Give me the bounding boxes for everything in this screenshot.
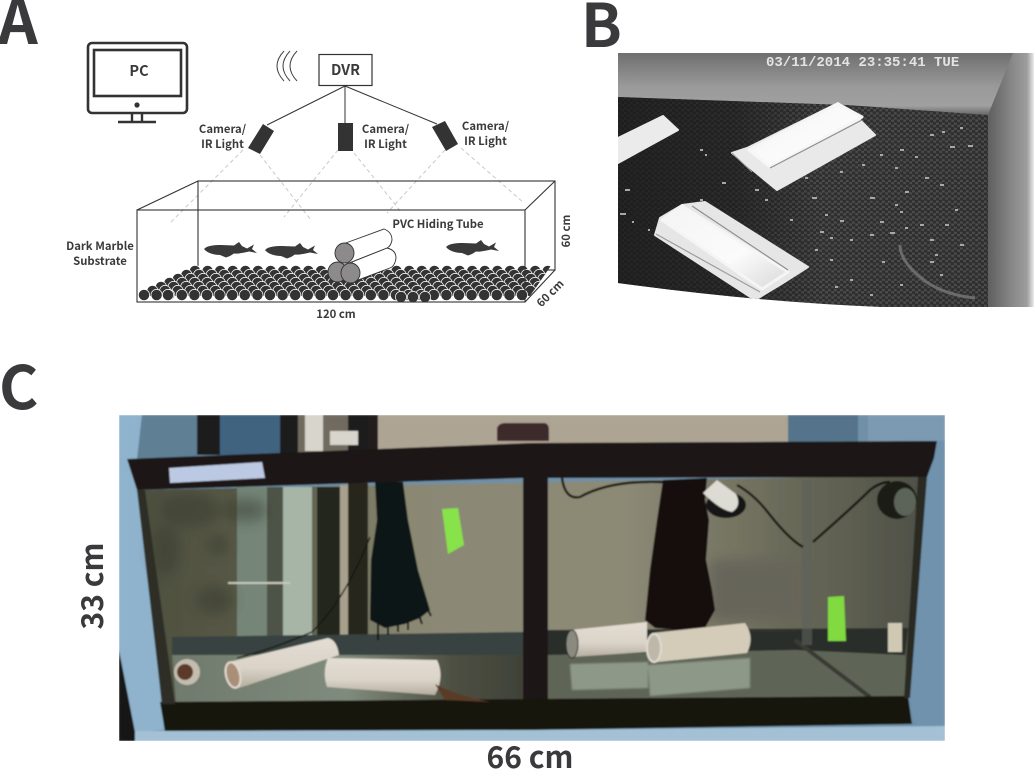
PVC hiding tubes [328,229,396,283]
camera fields of view [170,148,524,223]
green tape right [828,596,846,641]
icon: wireless signal [277,51,297,81]
air stone right [877,481,917,519]
camera label right: Camera/ [462,118,510,134]
PVC tube 3 [566,622,647,658]
panel B: infrared camera still [618,53,1034,310]
camera label centre: Camera/ [362,121,410,137]
DVR box [319,54,372,86]
bottom blue strip [135,726,945,741]
tank floor [172,655,524,704]
timestamp: 03/11/2014 23:35:41 TUE [766,55,959,71]
wires [237,478,890,658]
tank floor right [547,650,908,702]
fish 2 [265,243,318,258]
back wall [618,53,1034,115]
dimension: 60 cm height: 60 cm [558,215,574,247]
right side frame [904,477,927,698]
label: PVC hiding tube: PVC Hiding Tube [392,216,484,232]
top frame [127,441,937,490]
dark shading on floor [618,97,802,302]
vertical corner reflection [802,628,812,646]
tank handle [497,423,549,441]
tube left edge [618,116,678,163]
darker band behind right section [704,557,768,621]
panel C: aquarium photo [119,415,945,741]
right blue column [936,442,944,444]
marble substrate [138,265,579,303]
dead leaf [435,684,490,702]
upper tube pair [732,103,875,190]
air stone centre [703,480,746,518]
glass interior [137,475,927,704]
right tassel [645,478,715,630]
fish 1 [204,242,257,258]
green tape left [442,508,464,554]
lower tube pair [655,202,808,300]
camera label left: IR Light [201,136,244,152]
bottom frame [160,696,912,731]
dimension label: 33 cm: 33 cm [68,543,112,629]
tube reflections [570,658,750,696]
PVC tube 4 [647,623,751,662]
icon: camera centre [338,123,353,151]
dark corner [119,650,135,741]
tank back frame [137,181,555,302]
icon: PC monitor: PC [129,60,149,81]
left blue column [119,415,164,732]
cables from DVR to cameras [267,86,437,125]
camera label centre: IR Light [364,136,407,152]
algae patches [151,494,267,614]
label: dark marble substrate: Substrate [73,253,127,269]
background strip [137,415,944,460]
wall behind tank [119,415,945,741]
left tassel [370,482,431,640]
left corner tube end [174,659,200,685]
left side frame [137,490,175,704]
DVR box: DVR [331,59,360,80]
far right tube end [888,623,902,652]
far lower band left [172,632,524,656]
centre divider [523,475,548,705]
floor highlights [620,128,973,295]
blue label [169,462,265,483]
white pipes [305,415,358,451]
dimension: 60 cm depth: 60 cm [533,276,567,310]
panel letter C: C [0,340,38,427]
PVC tube 1 [223,638,339,689]
icon: PC monitor [88,43,187,122]
fish 3 [446,240,499,256]
tank front frame [137,210,525,302]
icon: camera left [248,124,274,154]
cable [900,245,975,298]
label: dark marble substrate: Dark Marble [66,238,134,254]
icon: camera right [432,121,458,151]
left background pipes [228,483,368,637]
camera label right: IR Light [464,133,507,149]
panel A: system diagram [66,43,579,322]
side wall [988,53,1034,310]
far lower band right [547,628,908,656]
dimension: 120 cm: 120 cm [316,306,356,322]
camera label left: Camera/ [199,121,247,137]
PVC tube 2 [325,658,441,695]
floor corner seam [795,640,870,697]
marble floor [618,97,988,310]
